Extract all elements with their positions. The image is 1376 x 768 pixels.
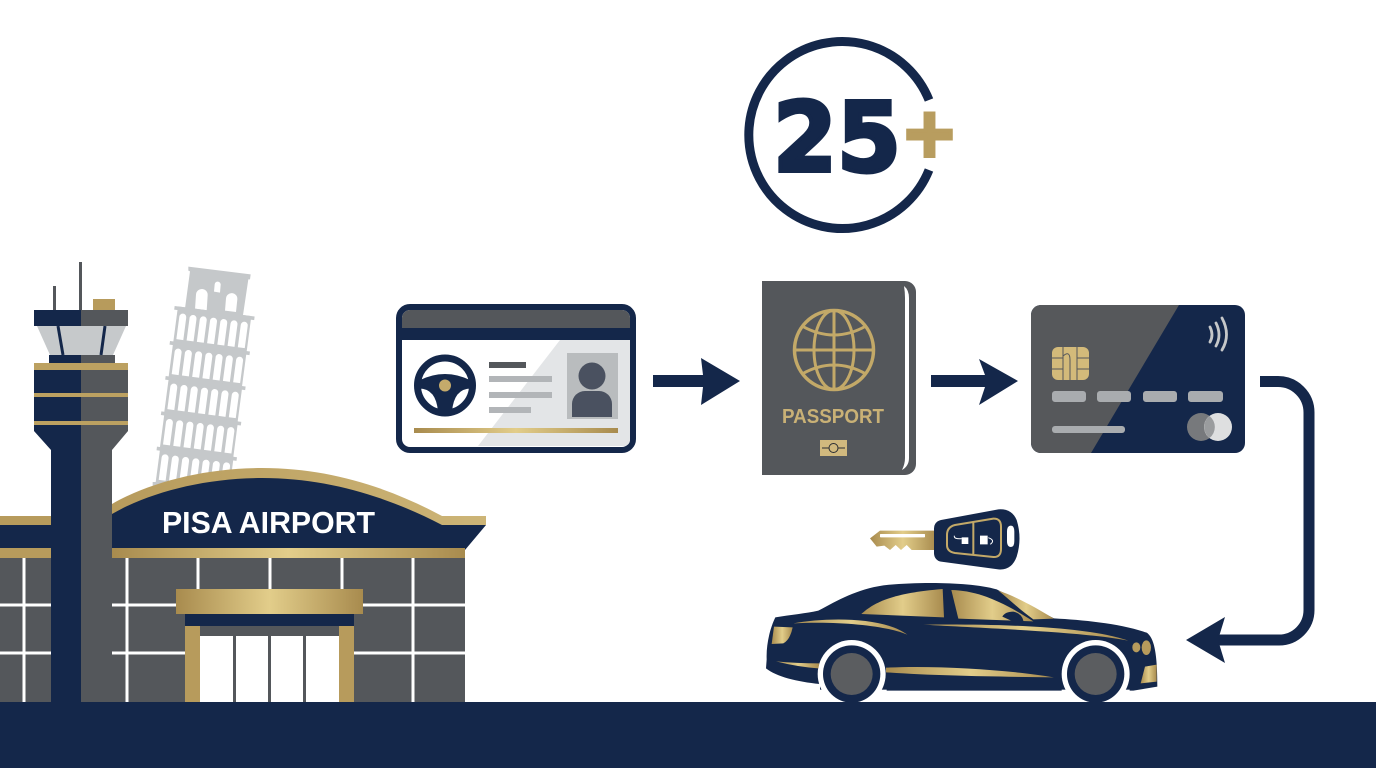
canopy navy band bbox=[185, 614, 354, 626]
terminal glazing bbox=[0, 558, 465, 702]
left gold trim bbox=[0, 516, 51, 525]
card sheen bbox=[478, 340, 630, 446]
tower gold bands bbox=[34, 363, 128, 425]
fascia lower gold band bbox=[112, 548, 465, 558]
passport pages bbox=[902, 286, 909, 470]
sign: Pisa Airport: PISA AIRPORT bbox=[162, 505, 375, 540]
header navy band bbox=[402, 328, 630, 340]
contactless symbol bbox=[1210, 318, 1226, 350]
car windows bbox=[861, 589, 1054, 621]
tower navy half bbox=[34, 310, 81, 702]
card frame bbox=[399, 307, 633, 450]
card body bbox=[1031, 305, 1245, 453]
tower belfry bbox=[185, 267, 251, 317]
wing mirror bbox=[1002, 612, 1023, 628]
card network logo bbox=[1187, 413, 1232, 441]
icon: car key bbox=[870, 509, 1019, 569]
icon: steering wheel bbox=[418, 358, 472, 413]
key blade bbox=[870, 531, 936, 550]
card header bbox=[402, 310, 630, 328]
icon: car bbox=[766, 583, 1157, 708]
icon: driving licence bbox=[399, 307, 633, 450]
badge plus: + bbox=[901, 94, 958, 173]
badge: 25+ minimum age bbox=[749, 42, 958, 229]
tower grey half bbox=[81, 310, 128, 702]
EMV chip bbox=[1052, 347, 1089, 380]
cab mullions bbox=[58, 326, 105, 355]
licence photo bbox=[567, 353, 618, 419]
entrance canopy bbox=[176, 589, 363, 614]
licence heading line bbox=[489, 362, 526, 368]
car body bbox=[766, 583, 1157, 691]
badge number: 25 bbox=[773, 82, 901, 194]
arrow: passport to credit card bbox=[931, 359, 1018, 405]
icon: passport bbox=[762, 281, 916, 475]
passport cover bbox=[762, 281, 916, 475]
door opening bbox=[200, 626, 339, 702]
icon: leaning tower of Pisa bbox=[152, 267, 255, 493]
window frames bbox=[0, 558, 465, 702]
globe bbox=[794, 310, 874, 390]
icon: credit card bbox=[1031, 305, 1245, 453]
tower cab glass bbox=[37, 326, 126, 355]
gold line bbox=[414, 428, 618, 433]
roof gold trim bbox=[112, 468, 486, 525]
panel: airport terminal bbox=[0, 468, 486, 702]
biometric chip symbol bbox=[820, 440, 847, 456]
arrow: credit card to car bbox=[1186, 382, 1309, 663]
arrow: licence to passport bbox=[653, 358, 740, 405]
passport label: PASSPORT bbox=[782, 405, 884, 428]
wheel arches bbox=[813, 640, 1130, 708]
tower galleries bbox=[152, 306, 255, 493]
headlights bbox=[1132, 640, 1151, 655]
glass doors bbox=[200, 636, 339, 702]
roof fascia bbox=[0, 478, 486, 550]
key fob bbox=[934, 509, 1019, 569]
licence text lines bbox=[489, 376, 552, 413]
antennas bbox=[53, 262, 82, 310]
roof box bbox=[93, 299, 115, 310]
badge ring bbox=[749, 42, 929, 229]
card number blocks bbox=[1052, 391, 1223, 402]
door posts bbox=[185, 626, 354, 702]
body gold accents bbox=[772, 620, 1157, 683]
left lower gold band bbox=[0, 548, 51, 558]
card grey side bbox=[1031, 305, 1179, 453]
entrance bbox=[176, 589, 363, 702]
wheels bbox=[823, 645, 1124, 703]
cardholder line bbox=[1052, 426, 1125, 433]
icon: control tower bbox=[34, 262, 128, 702]
ground strip bbox=[0, 702, 1376, 768]
